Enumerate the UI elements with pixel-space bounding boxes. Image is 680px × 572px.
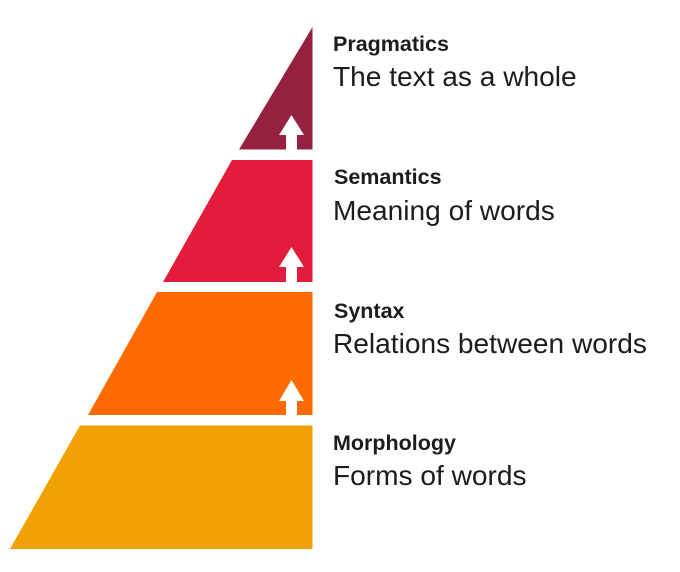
label: pragmatics: The text as a whole xyxy=(333,61,577,92)
label: syntax: Syntax xyxy=(334,299,405,323)
tier: pragmatics xyxy=(239,27,312,150)
label: syntax xyxy=(333,299,647,359)
label: morphology xyxy=(333,431,527,491)
label: semantics xyxy=(333,165,555,226)
label: pragmatics: Pragmatics xyxy=(333,32,449,56)
tier: syntax xyxy=(88,292,312,416)
label: morphology: Morphology xyxy=(333,431,456,455)
icon: arrow up from pragmatics xyxy=(279,115,304,150)
icon: arrow up from semantics xyxy=(279,247,304,283)
label: semantics: Meaning of words xyxy=(333,195,555,226)
tier: morphology xyxy=(10,426,312,549)
label: syntax: Relations between words xyxy=(333,328,647,359)
label: morphology: Forms of words xyxy=(333,460,527,491)
tier: semantics xyxy=(163,160,312,283)
icon: arrow up from syntax xyxy=(279,380,304,416)
label: pragmatics xyxy=(333,32,577,92)
label: semantics: Semantics xyxy=(334,165,442,189)
